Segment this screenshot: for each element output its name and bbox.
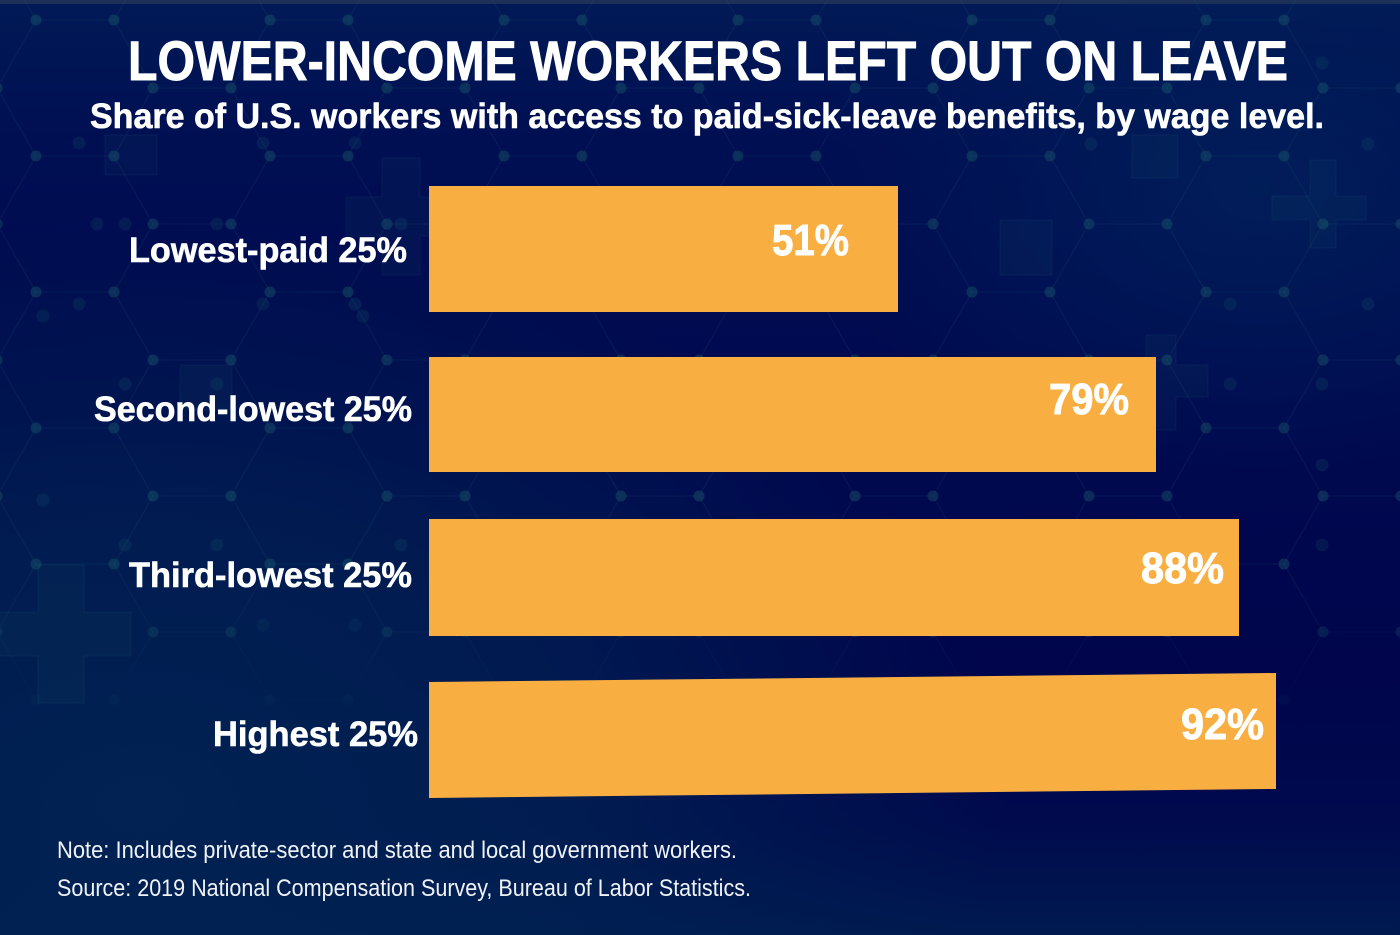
row: third-lowest 25%: 88% [1141, 544, 1224, 593]
row: lowest-paid 25%: 51% [772, 216, 849, 265]
row: highest 25%: 92% [1181, 700, 1264, 749]
row: second-lowest 25% [94, 357, 1156, 472]
subtitle: Share of U.S. workers with access to paid-sick-leave benefits, by wage level. [90, 97, 1324, 136]
row: second-lowest 25%: 79% [1049, 375, 1129, 424]
note: Note: Includes private-sector and state and local government workers. [57, 837, 737, 864]
note and source [57, 837, 751, 902]
row: lowest-paid 25% [129, 186, 898, 312]
row: highest 25%: Highest 25% [213, 715, 418, 754]
source: Source: 2019 National Compensation Survey, Bureau of Labor Statistics. [57, 875, 751, 902]
row: highest 25% [213, 673, 1276, 798]
row: third-lowest 25%: Third-lowest 25% [129, 556, 412, 595]
row: third-lowest 25% [129, 519, 1239, 636]
row: second-lowest 25%: Second-lowest 25% [94, 390, 412, 429]
bar chart [94, 186, 1276, 798]
row: lowest-paid 25%: Lowest-paid 25% [129, 231, 407, 270]
